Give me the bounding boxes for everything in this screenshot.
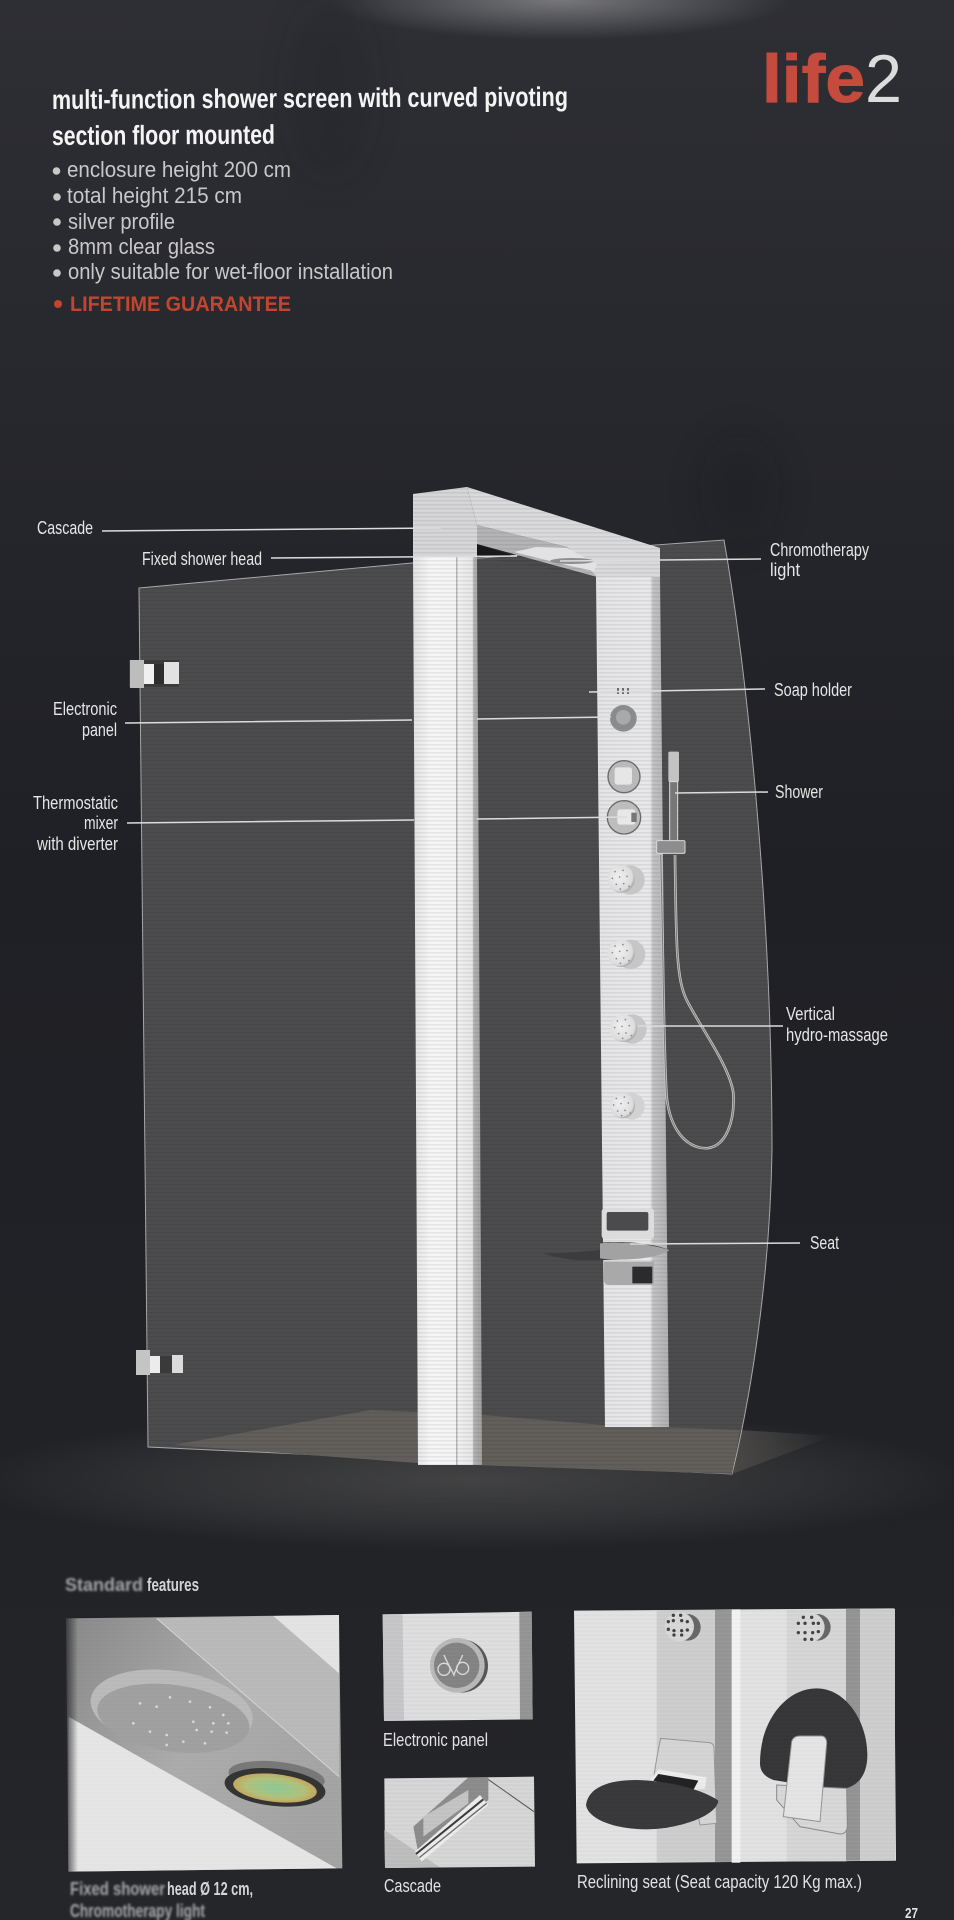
specification list: total height 215 cm bbox=[67, 183, 242, 208]
callout: Electronic panel bbox=[53, 699, 117, 740]
caption: Reclining seat: Reclining seat (Seat capacity 120 Kg max.) bbox=[577, 1872, 862, 1892]
shower head disc bbox=[85, 1660, 258, 1762]
callout: Seat: Seat bbox=[810, 1233, 839, 1253]
top beam bbox=[467, 487, 660, 577]
photo: electronic panel bbox=[383, 1612, 533, 1721]
beam underside bbox=[477, 525, 597, 577]
white wall top right bbox=[273, 1615, 339, 1673]
caption: fixed shower head: head Ø 12 cm, bbox=[167, 1879, 253, 1899]
beam opening bbox=[477, 544, 513, 557]
glass floor reflection bbox=[173, 1410, 740, 1474]
white wall bottom left bbox=[68, 1717, 337, 1872]
chromotherapy light bbox=[223, 1757, 327, 1811]
diverter knob bbox=[608, 761, 640, 793]
callout: Vertical hydro-massage: hydro-massage bbox=[786, 1025, 888, 1045]
standard features heading bbox=[65, 1575, 199, 1595]
specification list bbox=[53, 157, 393, 284]
electronic panel control bbox=[611, 706, 636, 731]
shower column: frame bbox=[413, 487, 669, 1465]
front post bbox=[413, 557, 482, 1465]
callout: Chromotherapy light: Chromotherapy bbox=[770, 540, 869, 560]
photo: fixed shower head and chromotherapy light bbox=[65, 1615, 343, 1873]
glass texture bbox=[139, 540, 772, 1474]
jets bbox=[665, 1612, 831, 1642]
cascade spout bbox=[415, 1795, 488, 1862]
callout: Thermostatic mixer with diverter bbox=[33, 793, 118, 854]
callout: Soap holder: Soap holder bbox=[774, 680, 852, 700]
floor outside glass bbox=[732, 1430, 833, 1474]
callout: Electronic panel: panel bbox=[82, 720, 117, 740]
post shading right bbox=[787, 1609, 847, 1861]
callout: Fixed shower head: Fixed shower head bbox=[142, 549, 262, 569]
soap holder bbox=[617, 688, 629, 694]
column texture bbox=[413, 487, 669, 1465]
door hinges bbox=[129, 660, 183, 1375]
controls and jets bbox=[607, 706, 734, 1148]
right panel bbox=[596, 576, 669, 1427]
fixed shower head bbox=[514, 547, 597, 571]
callout: Electronic panel: Electronic bbox=[53, 699, 117, 719]
photo divider bbox=[732, 1609, 740, 1863]
left edge fade bbox=[65, 1617, 78, 1873]
callout: Shower: Shower bbox=[775, 782, 823, 802]
post shading left bbox=[657, 1610, 717, 1862]
grey band bbox=[157, 1616, 339, 1777]
photo: cascade bbox=[384, 1777, 535, 1868]
callout: Thermostatic mixer with diverter: with diverter bbox=[36, 834, 118, 854]
heading bbox=[52, 82, 568, 151]
standard features heading: features bbox=[147, 1575, 199, 1595]
thermostatic mixer knob bbox=[607, 801, 641, 834]
heading: multi-function shower screen with curved pivoting bbox=[52, 82, 568, 115]
caption: fixed shower head: Fixed shower bbox=[70, 1879, 165, 1899]
reclining seat bbox=[543, 1208, 669, 1285]
product logo: life2: 2 bbox=[865, 41, 902, 117]
panel symbols bbox=[438, 1655, 469, 1675]
callout: Thermostatic mixer with diverter: mixer bbox=[84, 813, 118, 833]
callout: Chromotherapy light: light bbox=[770, 560, 800, 580]
callout: Chromotherapy light bbox=[770, 540, 869, 580]
cap front bbox=[413, 487, 477, 557]
specification list: enclosure height 200 cm bbox=[67, 157, 291, 182]
caption: Electronic panel: Electronic panel bbox=[383, 1730, 488, 1750]
caption: fixed shower head bbox=[70, 1879, 253, 1920]
callout: Cascade: Cascade bbox=[37, 518, 93, 538]
open seat bbox=[586, 1738, 718, 1829]
specification list: silver profile bbox=[68, 209, 175, 234]
massage jets bbox=[607, 865, 647, 1120]
callout: Vertical hydro-massage: Vertical bbox=[786, 1004, 835, 1024]
callout leader lines bbox=[102, 528, 800, 1244]
guarantee line: LIFETIME GUARANTEE bbox=[70, 293, 291, 316]
callout: Thermostatic mixer with diverter: Thermostatic bbox=[33, 793, 118, 813]
heading: section floor mounted bbox=[52, 120, 275, 151]
glass panel bbox=[139, 540, 772, 1474]
folded seat bbox=[760, 1688, 867, 1834]
photo: reclining seat bbox=[574, 1608, 896, 1863]
specification list: 8mm clear glass bbox=[68, 234, 215, 259]
specification list: only suitable for wet-floor installation bbox=[68, 259, 393, 284]
callout: Vertical hydro-massage bbox=[786, 1004, 888, 1045]
hand shower bbox=[657, 752, 734, 1148]
caption: Cascade: Cascade bbox=[384, 1876, 441, 1896]
standard features heading: Standard bbox=[65, 1575, 143, 1595]
product logo: life2: life bbox=[762, 41, 865, 117]
